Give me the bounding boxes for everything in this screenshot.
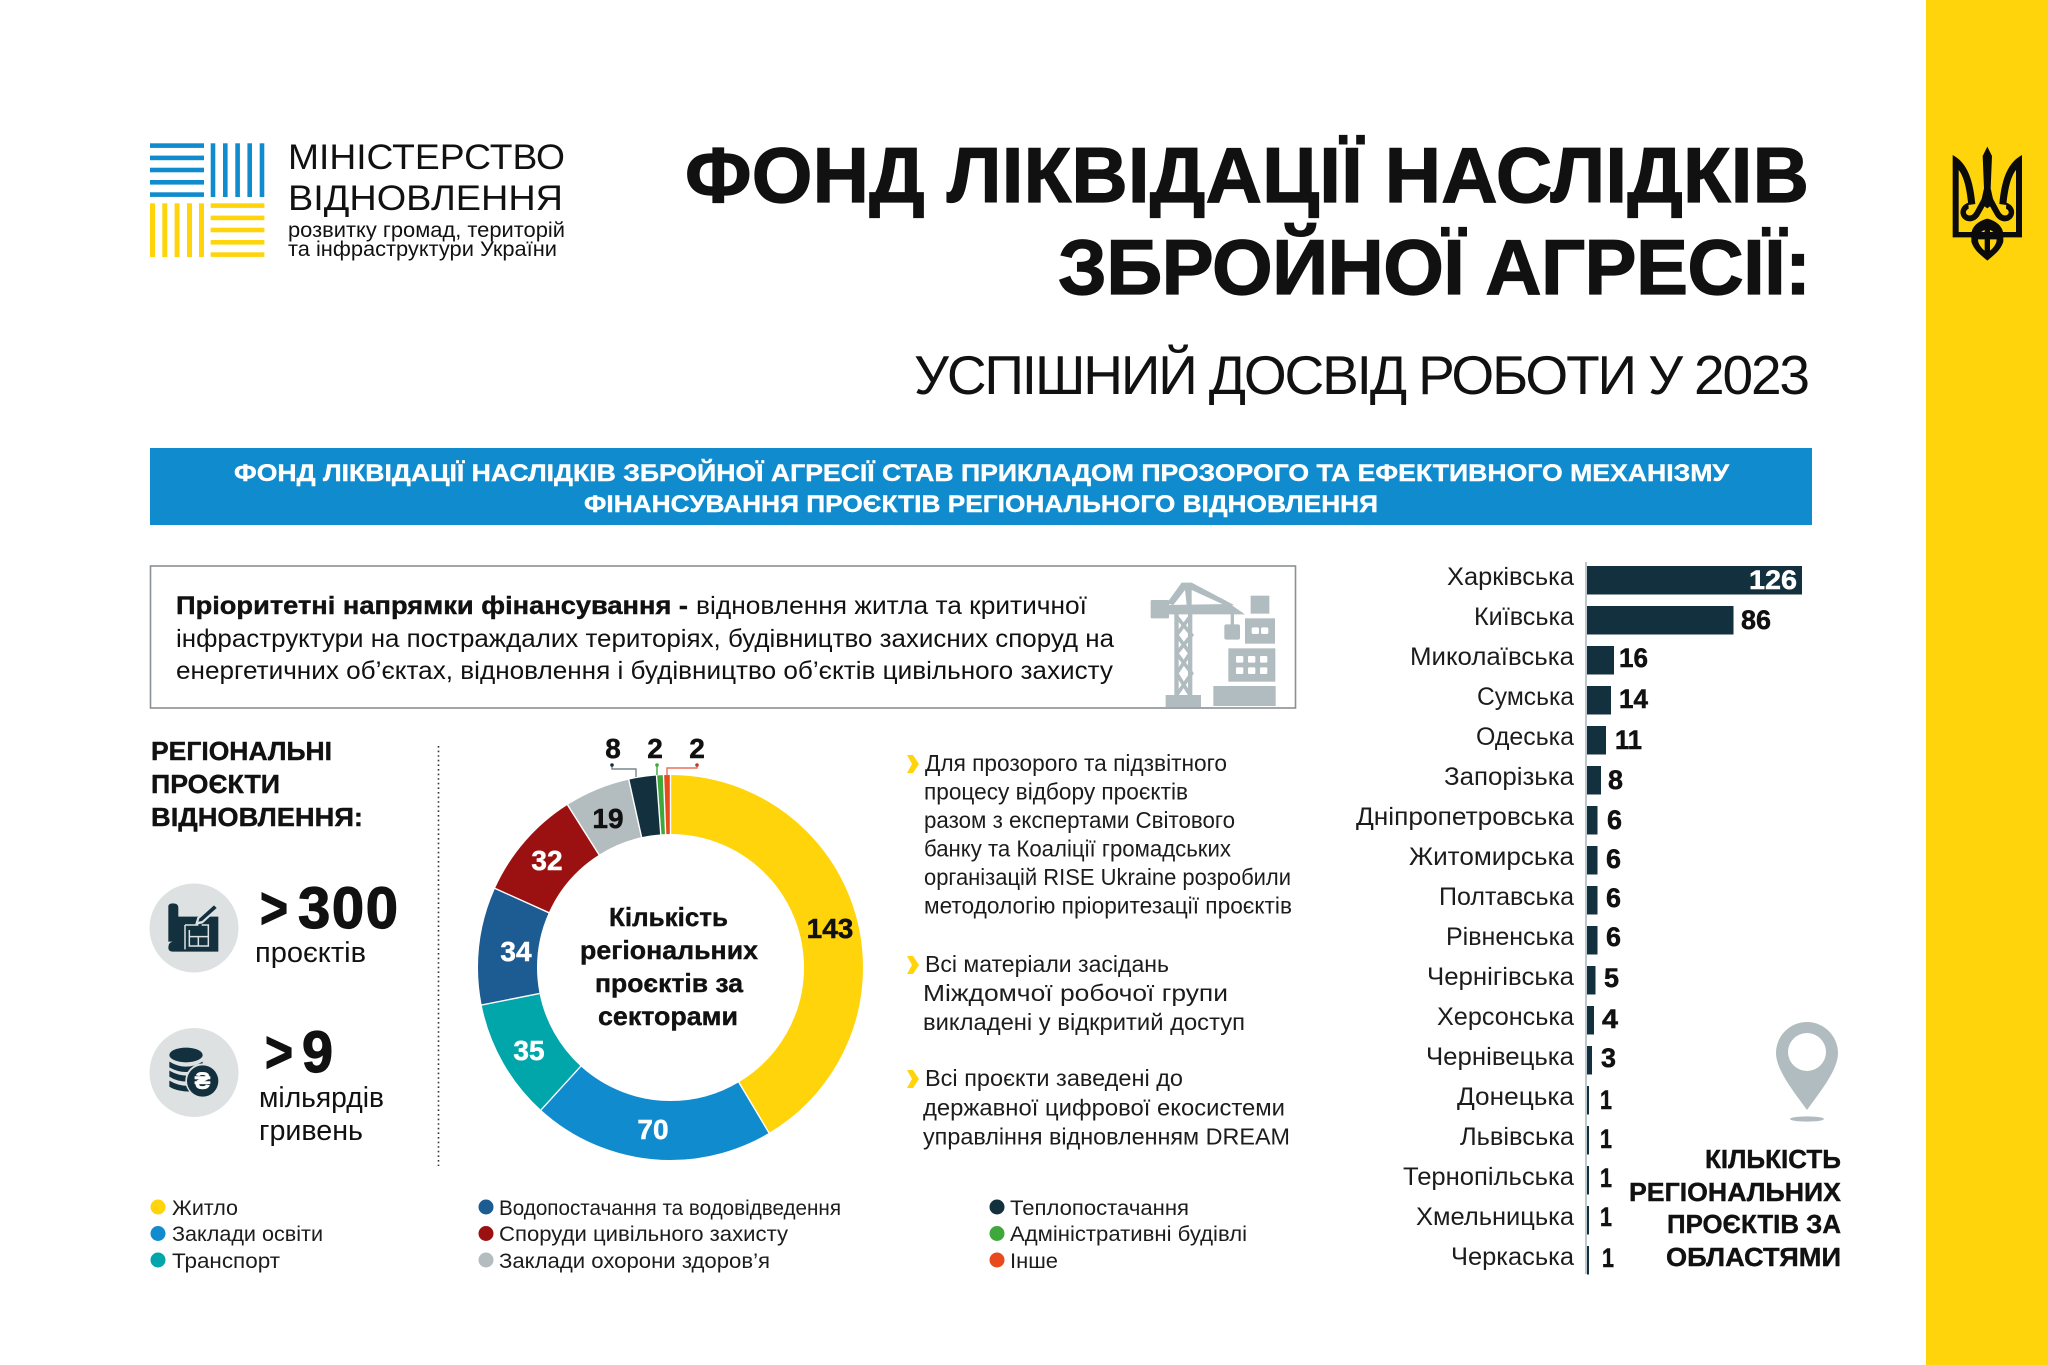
bar values: 126 — [1749, 565, 1797, 595]
bar values: 5 — [1604, 963, 1619, 993]
donut value labels: 2 — [647, 733, 663, 764]
heading: projects by oblast — [1629, 1144, 1842, 1272]
legend: Житло — [172, 1197, 238, 1220]
panel: funding priorities — [150, 566, 1296, 708]
heading: projects by oblast: РЕГІОНАЛЬНИХ — [1629, 1177, 1842, 1207]
donut centre caption: регіональних — [580, 935, 759, 965]
donut centre caption: Кількість — [609, 902, 728, 932]
legend: Транспорт — [172, 1250, 280, 1273]
bar values: 6 — [1606, 883, 1621, 913]
bar values: 3 — [1601, 1043, 1616, 1073]
bar values: 6 — [1606, 922, 1621, 952]
oblast labels: Полтавська — [1439, 883, 1574, 911]
oblast labels: Львівська — [1460, 1123, 1574, 1151]
bar values: 1 — [1602, 1243, 1614, 1273]
priorities text: Пріоритетні напрямки фінансування - — [176, 592, 688, 620]
stat: billions of hryvnias: > — [265, 1020, 293, 1085]
stat: billions of hryvnias: мільярдів — [259, 1082, 384, 1114]
legend: Теплопостачання — [1010, 1197, 1189, 1220]
bullet list — [907, 750, 1292, 1150]
bars — [1587, 566, 1802, 1274]
bullet: DREAM: управління відновленням DREAM — [923, 1124, 1290, 1150]
donut value labels: 143 — [807, 913, 853, 944]
oblast labels: Одеська — [1476, 723, 1574, 751]
logo text — [288, 138, 565, 261]
oblast labels: Херсонська — [1437, 1003, 1574, 1031]
oblast labels: Тернопільська — [1403, 1163, 1574, 1191]
oblast labels — [1356, 563, 1574, 1271]
icon: coins — [150, 1028, 238, 1117]
donut value labels: 32 — [531, 845, 563, 876]
title — [685, 131, 1811, 311]
bullet: open access: Міждомчої робочої групи — [923, 980, 1228, 1006]
stat: projects count — [150, 876, 398, 972]
legend: Адміністративні будівлі — [1010, 1223, 1247, 1246]
bar values: 4 — [1602, 1004, 1618, 1034]
legend: Водопостачання та водовідведення — [499, 1197, 841, 1220]
yellow side stripe — [1926, 0, 2048, 1365]
heading: projects by oblast: КІЛЬКІСТЬ — [1705, 1144, 1841, 1174]
banner — [150, 448, 1812, 525]
logo: Ministry of Restoration — [150, 138, 565, 261]
bullet: methodology: процесу відбору проєктів — [924, 778, 1188, 804]
oblast labels: Миколаївська — [1410, 643, 1574, 671]
bullet: methodology: разом з експертами Світового — [924, 807, 1235, 833]
logo mark — [150, 143, 264, 257]
bullet: open access: Всі матеріали засідань — [925, 951, 1169, 977]
bullet: methodology: організацій RISE Ukraine розробили — [924, 864, 1291, 890]
stat: billions of hryvnias — [150, 1020, 384, 1147]
donut value labels: 19 — [592, 803, 624, 834]
stat: projects count: 300 — [298, 876, 398, 941]
priorities text: інфраструктури на постраждалих територіях, будівництво захисних споруд на — [176, 625, 1114, 653]
bullet: open access — [907, 951, 1245, 1035]
stat: projects count: > — [260, 876, 288, 941]
logo text: розвитку громад, територій — [288, 219, 565, 242]
bar values: 1 — [1600, 1202, 1612, 1232]
donut chart: projects by sector — [481, 733, 853, 1145]
banner: ФІНАНСУВАННЯ ПРОЄКТІВ РЕГІОНАЛЬНОГО ВІДНОВЛЕННЯ — [584, 491, 1378, 518]
logo text: МІНІСТЕРСТВО — [288, 138, 565, 177]
bullet: methodology: методологію пріоритезації проєктів — [924, 892, 1292, 918]
bullet: methodology: банку та Коаліції громадських — [924, 836, 1231, 862]
legend: Споруди цивільного захисту — [499, 1223, 789, 1246]
oblast labels: Донецька — [1457, 1083, 1574, 1111]
oblast labels: Дніпропетровська — [1356, 803, 1574, 831]
bar values — [1600, 565, 1797, 1273]
heading: regional projects — [151, 736, 363, 832]
donut value labels — [500, 733, 853, 1145]
oblast labels: Харківська — [1447, 563, 1574, 591]
bullet: methodology — [907, 750, 1292, 918]
bullet: DREAM: Всі проєкти заведені до — [925, 1065, 1183, 1091]
bar axis — [1585, 562, 1587, 1274]
stat: billions of hryvnias: 9 — [302, 1020, 333, 1085]
donut centre caption — [580, 902, 759, 1031]
bar values: 6 — [1607, 805, 1622, 835]
heading: projects by oblast: ПРОЄКТІВ ЗА — [1667, 1209, 1841, 1239]
bar chart: projects by oblast — [1356, 562, 1802, 1274]
subtitle: УСПІШНИЙ ДОСВІД РОБОТИ У 2023 — [914, 343, 1810, 406]
title: ЗБРОЙНОЇ АГРЕСІЇ: — [1058, 223, 1811, 311]
donut segments — [508, 804, 834, 1130]
priorities text: відновлення житла та критичної — [696, 592, 1087, 620]
banner: ФОНД ЛІКВІДАЦІЇ НАСЛІДКІВ ЗБРОЙНОЇ АГРЕСІЇ СТАВ ПРИКЛАДОМ ПРОЗОРОГО ТА ЕФЕКТИВНОГО МЕХАНІЗМУ — [234, 459, 1730, 487]
heading: regional projects: РЕГІОНАЛЬНІ — [151, 736, 332, 766]
donut value labels: 70 — [637, 1114, 669, 1145]
heading: regional projects: ПРОЄКТИ — [151, 769, 280, 799]
donut centre caption: секторами — [598, 1001, 738, 1031]
title: ФОНД ЛІКВІДАЦІЇ НАСЛІДКІВ — [685, 131, 1809, 219]
donut value labels: 2 — [689, 733, 705, 764]
legend: Інше — [1010, 1250, 1058, 1273]
bar values: 14 — [1619, 684, 1648, 714]
bar values: 1 — [1600, 1124, 1612, 1154]
small segment leader lines — [610, 763, 699, 777]
bullet: DREAM — [907, 1065, 1290, 1150]
bar values: 6 — [1606, 844, 1621, 874]
oblast labels: Рівненська — [1446, 923, 1574, 951]
bar values: 86 — [1741, 605, 1771, 635]
legend — [150, 1197, 1247, 1273]
oblast labels: Житомирська — [1409, 843, 1574, 871]
donut value labels: 8 — [605, 733, 621, 764]
logo text: та інфраструктури України — [288, 238, 557, 261]
oblast labels: Київська — [1474, 603, 1574, 631]
oblast labels: Черкаська — [1451, 1243, 1574, 1271]
donut value labels: 35 — [513, 1035, 545, 1066]
oblast labels: Чернівецька — [1426, 1043, 1574, 1071]
priorities text — [176, 592, 1114, 685]
oblast labels: Чернігівська — [1427, 963, 1574, 991]
icon: location pin — [1776, 1022, 1838, 1122]
priorities text: енергетичних об’єктах, відновлення і будівництво об’єктів цивільного захисту — [176, 657, 1114, 685]
bar values: 16 — [1619, 643, 1648, 673]
bullet: open access: викладені у відкритий доступ — [923, 1009, 1245, 1035]
bar values: 8 — [1608, 765, 1623, 795]
bar values: 11 — [1615, 725, 1642, 755]
stat: billions of hryvnias: гривень — [259, 1115, 363, 1147]
donut value labels: 34 — [500, 936, 532, 967]
icon: Ukrainian trident — [1953, 147, 2022, 261]
icon: blueprint — [150, 884, 238, 972]
logo text: ВІДНОВЛЕННЯ — [288, 179, 563, 218]
bar values: 1 — [1600, 1085, 1612, 1115]
icon: coins: ₴ — [194, 1068, 211, 1095]
stat: projects count: проєктів — [255, 937, 366, 969]
bullet: DREAM: державної цифрової екосистеми — [923, 1094, 1285, 1120]
legend: Заклади охорони здоров’я — [499, 1250, 770, 1273]
bullet: methodology: Для прозорого та підзвітного — [925, 750, 1227, 776]
icon: crane and building — [1151, 583, 1276, 707]
heading: projects by oblast: ОБЛАСТЯМИ — [1666, 1242, 1841, 1272]
oblast labels: Сумська — [1477, 683, 1574, 711]
donut centre caption: проєктів за — [595, 968, 744, 998]
legend: Заклади освіти — [172, 1223, 323, 1246]
oblast labels: Запорізька — [1444, 763, 1574, 791]
heading: regional projects: ВІДНОВЛЕННЯ: — [151, 802, 363, 832]
oblast labels: Хмельницька — [1416, 1203, 1574, 1231]
bar values: 1 — [1600, 1163, 1612, 1193]
